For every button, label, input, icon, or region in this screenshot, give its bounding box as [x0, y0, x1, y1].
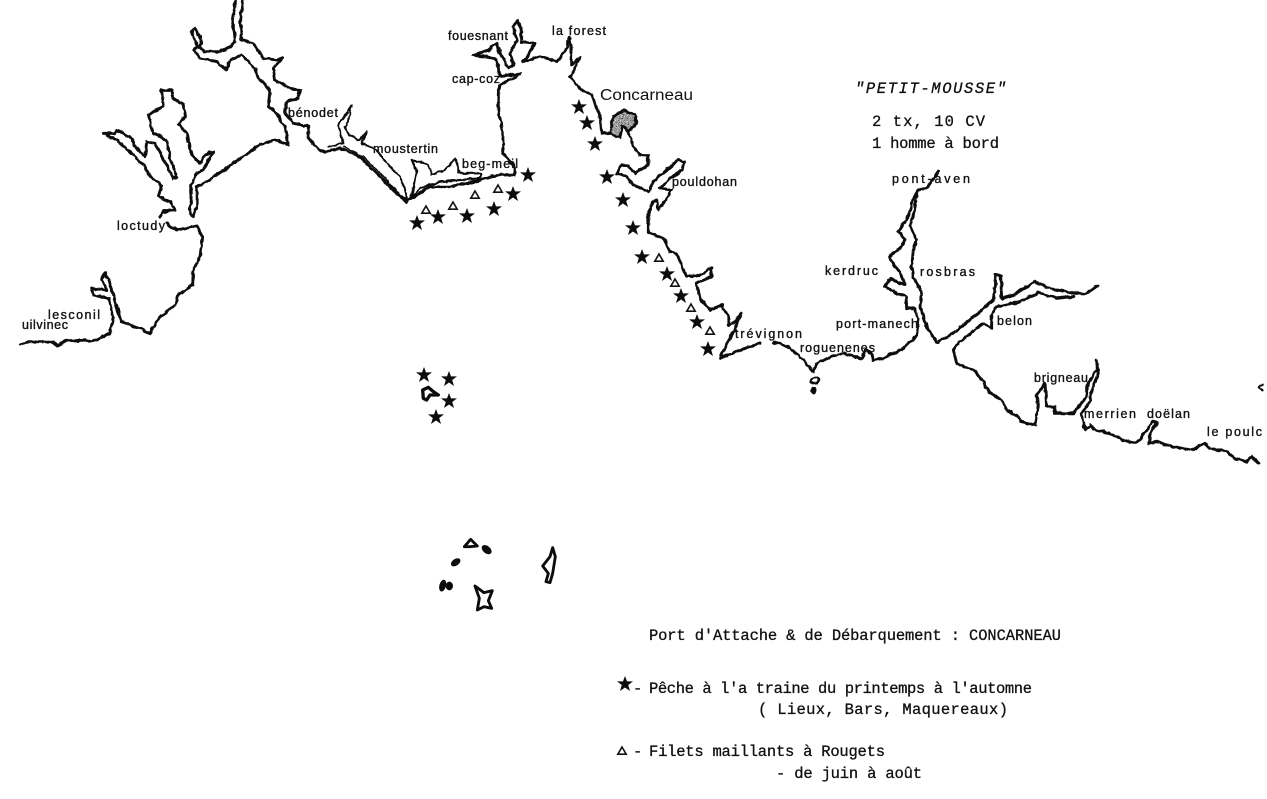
place names: roguenenes: [800, 341, 875, 355]
place names: brigneau: [1034, 371, 1088, 385]
place names: la forest: [552, 24, 607, 38]
vessel name: "PETIT-MOUSSE": [855, 80, 1006, 98]
place names: bénodet: [288, 106, 339, 120]
place names: [22, 24, 1262, 439]
legend: gillnets: - de juin à août: [776, 765, 922, 783]
legend: gillnets: [618, 743, 922, 783]
place names: belon: [997, 314, 1032, 328]
vessel specs: [872, 113, 999, 153]
place names: trévignon: [735, 327, 802, 341]
place names: pouldohan: [672, 175, 737, 189]
place names: merrien: [1084, 407, 1136, 421]
place names: lesconil: [48, 308, 100, 322]
place names: fouesnant: [448, 29, 509, 43]
islands: Moutons and Glénan: [423, 387, 555, 610]
place names: rosbras: [920, 265, 975, 279]
place names: cap-coz: [452, 72, 500, 86]
place names: doëlan: [1147, 407, 1190, 421]
vessel specs: 2 tx, 10 CV: [872, 113, 986, 131]
legend: gillnets: -: [633, 743, 642, 761]
coastline: east, Pont-Aven to Le Pouldu: [773, 172, 1263, 463]
place names: beg-meil: [462, 157, 518, 171]
place names: uilvinec: [22, 318, 68, 332]
vessel specs: 1 homme à bord: [872, 135, 999, 153]
concarneau bay stipple: [610, 110, 637, 137]
stars: trolling zones: [409, 99, 716, 424]
place names: pont-aven: [892, 172, 970, 186]
place names: moustertin: [373, 142, 438, 156]
port name: Concarneau: Concarneau: [600, 87, 693, 104]
coastline: centre, Beg-Meil to Trévignon: [408, 20, 760, 358]
legend: trolling: [617, 676, 1032, 719]
place names: loctudy: [117, 219, 166, 233]
coastline: west, Lesconil to Mousterlin: [21, 0, 407, 345]
place names: port-manech: [836, 317, 918, 331]
triangles: gillnet zones: [422, 185, 714, 334]
legend: trolling: ( Lieux, Bars, Maquereaux): [758, 701, 1008, 719]
place names: le poulc: [1207, 425, 1262, 439]
legend: gillnets: Filets maillants à Rougets: [649, 743, 885, 761]
home port heading: Port d'Attache & de Débarquement :: [649, 627, 960, 645]
legend: trolling: Pêche à l'a traine du printemps à l'automne: [649, 680, 1032, 698]
home port heading: CONCARNEAU: [969, 627, 1061, 645]
place names: kerdruc: [825, 264, 878, 278]
legend: trolling: -: [633, 680, 642, 698]
